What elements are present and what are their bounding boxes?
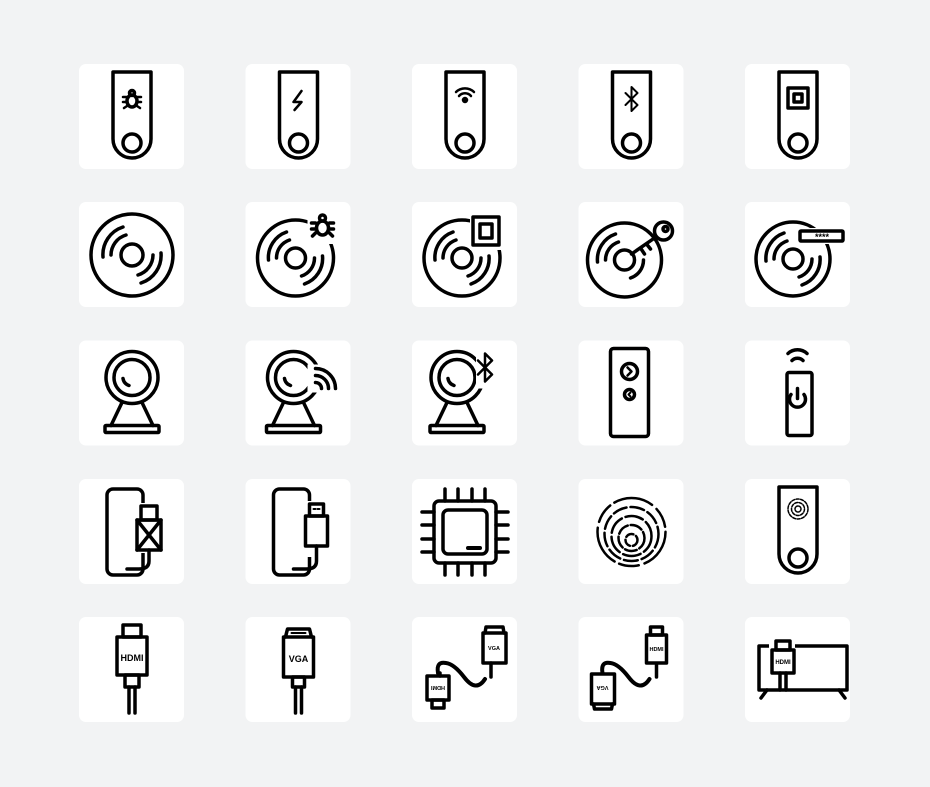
icon: webcam — [79, 340, 184, 446]
icon: usb key fingerprint — [745, 479, 850, 584]
icon: disc password: **** — [815, 232, 829, 242]
icon: remote power — [745, 340, 850, 446]
icon: vga to hdmi cable: VGA — [597, 684, 608, 690]
icon: usb key bluetooth — [578, 64, 684, 169]
icon: hdmi plug: HDMI — [120, 653, 144, 663]
icon: phone usb blocked — [79, 479, 184, 584]
icon: tv hdmi: HDMI — [775, 660, 791, 666]
icon: disc chip — [412, 202, 517, 307]
icon: vga to hdmi cable — [578, 617, 684, 722]
icon: phone usb — [246, 479, 350, 584]
icon: vga plug — [246, 617, 350, 722]
icon: remote arrows — [578, 340, 684, 446]
icon: hdmi plug — [79, 617, 184, 722]
icon: disc — [79, 202, 184, 307]
icon: webcam wifi — [246, 340, 350, 446]
icon: vga plug: VGA — [289, 654, 309, 664]
icon: usb key chip — [745, 64, 850, 169]
icon: cpu chip — [412, 479, 517, 584]
icon: hdmi to vga cable: VGA — [488, 646, 500, 652]
icon: hdmi to vga cable: HDMI — [431, 684, 445, 690]
icon: fingerprint — [578, 479, 684, 584]
icon: hdmi to vga cable — [412, 617, 517, 722]
icon: disc bug — [246, 202, 350, 307]
icon: usb key wifi — [412, 64, 517, 169]
icon: usb key bolt — [246, 64, 350, 169]
icon: tv hdmi — [745, 617, 850, 722]
icon: usb key bug — [79, 64, 184, 169]
icon: disc password — [745, 202, 850, 307]
icon: disc key — [578, 202, 684, 307]
icon: webcam bluetooth — [412, 340, 517, 446]
icon: vga to hdmi cable: HDMI — [649, 647, 664, 653]
